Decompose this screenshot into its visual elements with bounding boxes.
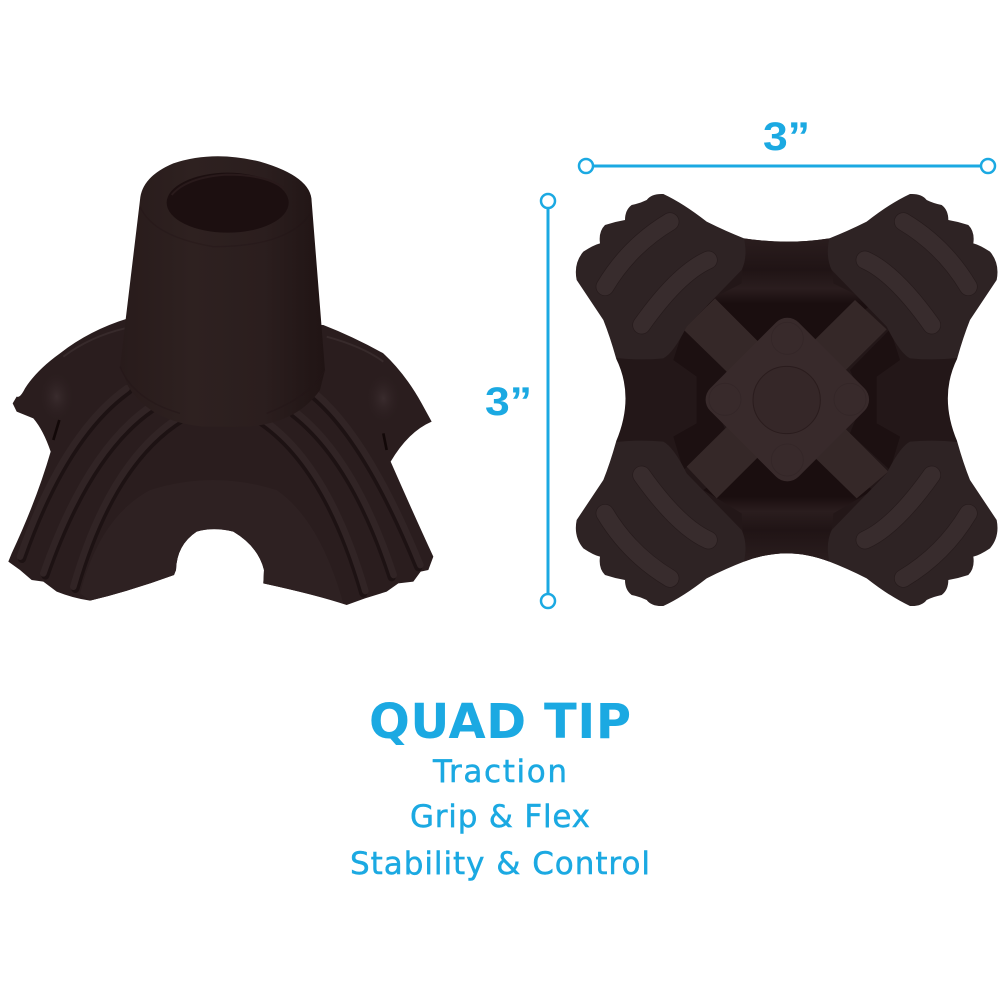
left wing highlight — [38, 370, 75, 423]
diamond corner rings — [709, 322, 866, 476]
back wing ridges — [63, 328, 383, 362]
collar line — [120, 367, 325, 413]
center diamond — [699, 311, 876, 488]
cross arm A — [683, 298, 888, 498]
cone body — [120, 156, 325, 427]
lobe: top right — [828, 194, 997, 359]
height label: 3” — [485, 380, 532, 424]
feature: grip and flex: Grip & Flex — [410, 799, 590, 835]
lobe: bottom left — [576, 441, 746, 606]
product photo: quad tip underside view — [576, 194, 997, 606]
inner dark: left — [673, 329, 727, 470]
recess: bottom — [703, 457, 873, 562]
title: QUAD TIP — [369, 694, 631, 750]
lobe: top left — [576, 194, 746, 359]
width label: 3” — [763, 115, 810, 159]
ribs right — [262, 393, 420, 593]
cross arm B — [687, 300, 887, 498]
lobe: bottom right — [828, 441, 997, 606]
ribs left — [20, 388, 182, 589]
inner dark: right — [850, 329, 900, 470]
arch above notch — [80, 480, 343, 603]
right wing highlight — [365, 372, 402, 425]
width dimension line — [579, 159, 995, 173]
feature: traction: Traction — [432, 754, 567, 790]
opening inner shade — [172, 175, 283, 195]
center stud — [753, 366, 820, 434]
height dimension line — [541, 194, 555, 608]
underside central body — [616, 238, 957, 562]
feature: stability and control: Stability & Control — [350, 846, 650, 882]
left wing slot — [53, 420, 59, 440]
recess: top — [703, 238, 873, 343]
product photo: quad tip side view — [8, 156, 433, 605]
right wing slot — [383, 433, 387, 450]
tip base silhouette — [8, 318, 433, 605]
cone opening — [167, 173, 289, 233]
cone rim — [140, 207, 312, 247]
